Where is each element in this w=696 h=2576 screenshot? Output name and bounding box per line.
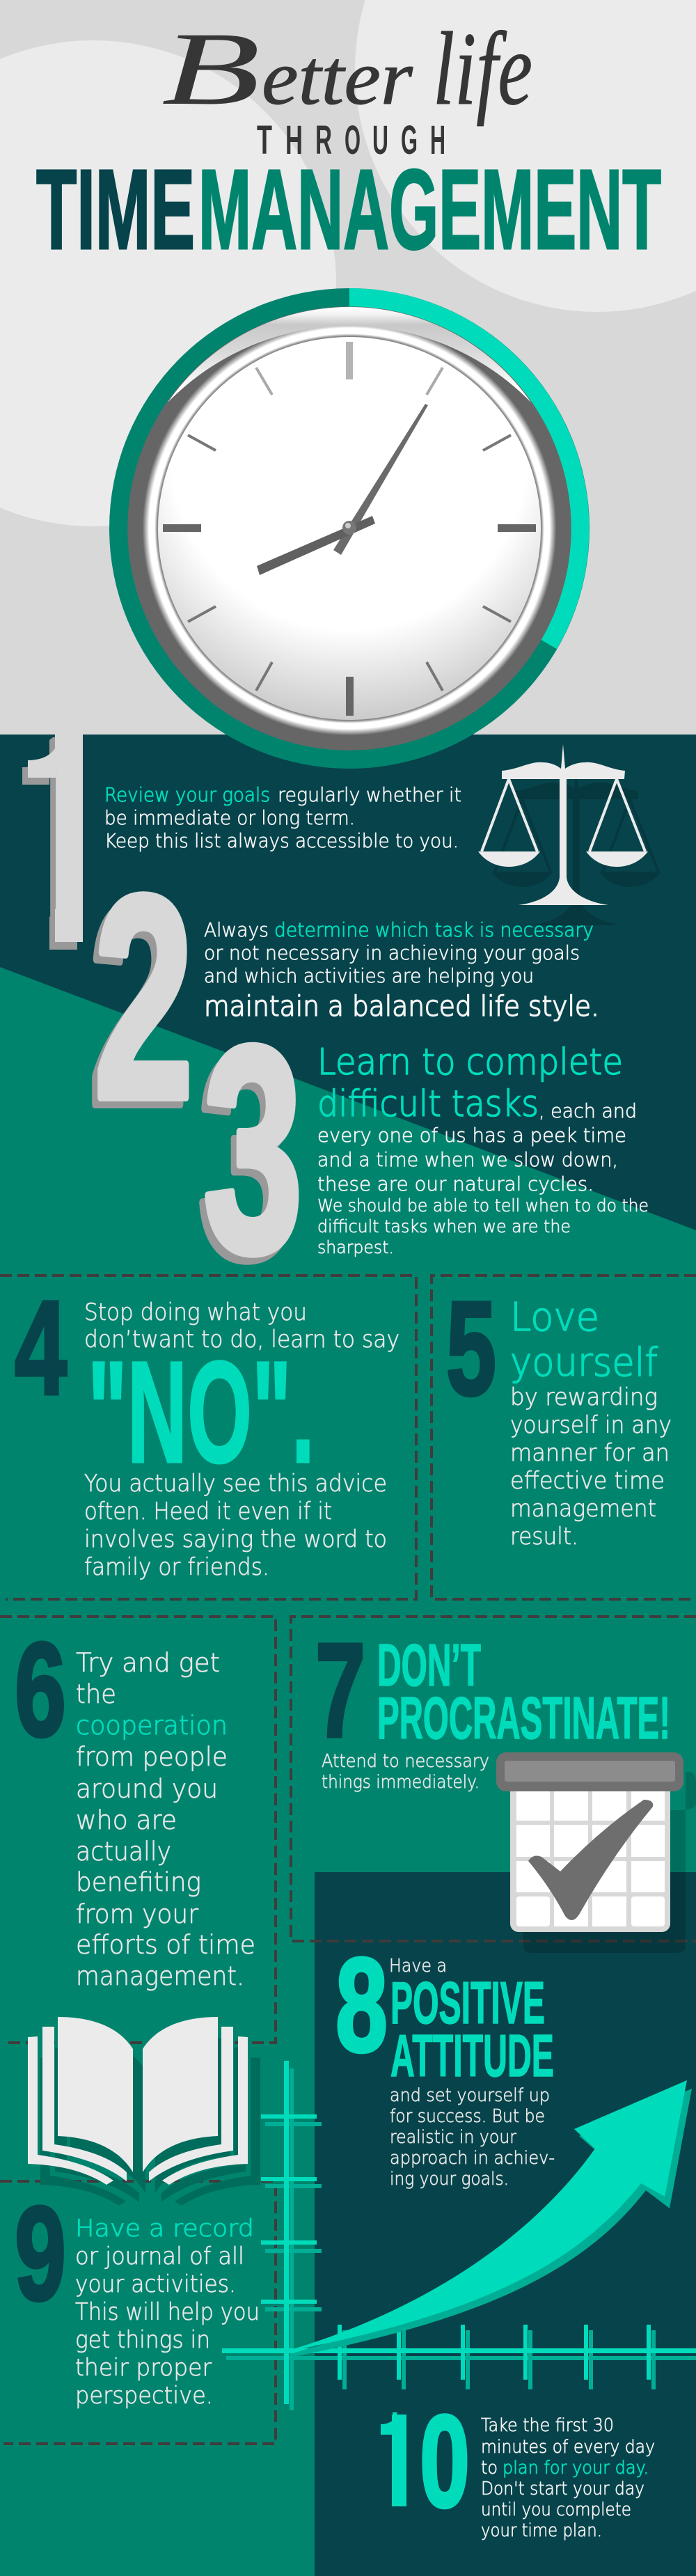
tip 10 text: to [481, 2458, 498, 2479]
number 1 [22, 735, 83, 950]
number 4: 4 [15, 1273, 67, 1422]
tip 1 text: regularly whether it [278, 783, 461, 806]
title: U [372, 118, 388, 163]
tip 8 heading: ATTITUDE [390, 2023, 554, 2089]
tip 1 text [104, 783, 461, 852]
tip 1 text: be immediate or long term. [104, 806, 355, 829]
tip 3 text [317, 1042, 649, 1257]
clock [109, 288, 590, 769]
tip 3 text: every one of us has a peek time [317, 1124, 626, 1147]
tip 2 text [204, 918, 599, 1023]
tip 10 text: plan for your day. [503, 2458, 649, 2479]
tip 6 text: from people [76, 1742, 228, 1772]
tip 6 text: Try and get [76, 1648, 220, 1678]
tip 10 text [481, 2415, 655, 2541]
tip 3 text: and a time when we slow down, [317, 1148, 618, 1171]
panel: tip 7 border [291, 1617, 696, 1941]
tip 2 text: Always [204, 918, 269, 941]
tip 10 text: Don't start your day [481, 2479, 644, 2499]
title: B [161, 11, 260, 127]
number 1: 1 [0, 666, 141, 1007]
number 3 [198, 987, 303, 1320]
tip 8 text: Have a [389, 1956, 447, 1977]
tip 4 text [84, 1298, 400, 1581]
tip 8 heading [390, 1970, 554, 2089]
clock ticks [163, 342, 536, 716]
number 2: 2 [94, 835, 193, 1159]
tip 3 text: Learn to complete [317, 1042, 623, 1083]
tip 2 text: determine which task is necessary [274, 918, 594, 941]
tip 6 text: management. [76, 1961, 244, 1991]
tip 6 text: around you [76, 1774, 218, 1804]
tip 4 text: involves saying the word to [84, 1525, 387, 1553]
tip 6 text [76, 1648, 255, 1991]
tip 3 text: these are our natural cycles. [317, 1172, 594, 1195]
tip 9 text: or journal of all [75, 2243, 244, 2270]
number 7: 7 [315, 1615, 365, 1765]
title: etter [262, 35, 413, 121]
tip 7 text: Attend to necessary [322, 1751, 489, 1772]
title: T [257, 118, 272, 163]
panel: tip 6 border [0, 1617, 276, 2043]
tip 4 text: don’twant to do, learn to say [84, 1326, 400, 1353]
tip 2 text: maintain a balanced life style. [204, 991, 599, 1023]
tip 5 text: yourself in any [510, 1411, 672, 1439]
tip 6 text: efforts of time [76, 1930, 255, 1960]
tip 6 text: who are [76, 1805, 177, 1835]
icon: book shadow [40, 2038, 260, 2206]
tip 3 text: , each and [539, 1099, 637, 1122]
title: life [433, 11, 532, 127]
tip 8 text: for success. But be [390, 2106, 545, 2127]
tip 9 text: their proper [75, 2354, 212, 2382]
number 6: 6 [15, 1615, 66, 1764]
title: O [345, 118, 361, 163]
tip 4 text: often. Heed it even if it [84, 1498, 332, 1525]
icon: scales shadow [491, 764, 661, 925]
tip 8 text: approach in achiev- [390, 2148, 555, 2169]
title [36, 11, 661, 273]
tip 9 text: Have a record [75, 2215, 254, 2243]
tip 5 text: effective time [510, 1467, 665, 1495]
tip 7 heading [377, 1633, 670, 1752]
icon: calendar [496, 1752, 683, 1932]
number 2: 2 [88, 842, 188, 1165]
tip 5 text: result. [510, 1523, 578, 1550]
number 10: 0 [420, 2388, 470, 2534]
callout: NO: "NO". [88, 1332, 315, 1493]
chart axes shadow [226, 2068, 696, 2410]
tip 8 text [389, 1956, 555, 2190]
number 9: 9 [15, 2178, 66, 2328]
number 10 [381, 2412, 468, 2509]
panel: tip 5 border [432, 1275, 696, 1599]
tip 2 text: or not necessary in achieving your goals [204, 941, 580, 964]
number 10: 1 [366, 2388, 429, 2534]
panel: tip 4 border [0, 1275, 416, 1599]
icon: check mark [528, 1800, 653, 1920]
tip 8 heading: POSITIVE [390, 1970, 545, 2036]
number 5: 5 [446, 1273, 496, 1423]
tip 5 text: manner for an [510, 1439, 670, 1467]
tip 3 text: difficult tasks when we are the [317, 1216, 571, 1236]
tip 9 text: your activities. [75, 2270, 236, 2298]
tip 5 text: yourself [510, 1340, 658, 1385]
tip 7 text [322, 1751, 489, 1793]
tip 9 text: This will help you [75, 2298, 260, 2326]
number 3: 3 [203, 987, 303, 1313]
title: TIME [36, 146, 195, 273]
tip 3 text: sharpest. [317, 1237, 394, 1257]
tip 4 text: Stop doing what you [84, 1298, 307, 1326]
panel: tip 9 border [0, 2181, 276, 2444]
title: H [285, 118, 303, 163]
title: H [430, 118, 445, 163]
tip 6 text: from your [76, 1899, 199, 1929]
tip 7 text: things immediately. [322, 1772, 480, 1793]
icon: calendar shadow [523, 1772, 696, 1953]
tip 5 text: by rewarding [510, 1383, 658, 1411]
title: G [401, 118, 418, 163]
tip 9 text [75, 2215, 260, 2410]
chart axes [222, 2061, 696, 2404]
tip 10 text: until you complete [481, 2499, 631, 2520]
tip 8 text: ing your goals. [390, 2169, 509, 2190]
tip 9 text: perspective. [75, 2382, 213, 2410]
tip 9 text: get things in [75, 2326, 210, 2354]
tip 10 text: Take the first 30 [481, 2415, 614, 2436]
tip 1 text: Keep this list always accessible to you. [104, 829, 459, 852]
tip 10 text: your time plan. [481, 2520, 602, 2541]
icon: scales [478, 744, 648, 905]
tip 5 text: management [510, 1495, 656, 1523]
tip 3 text: We should be able to tell when to do the [317, 1195, 649, 1216]
tip 8 text: realistic in your [390, 2127, 516, 2148]
clock hands [257, 404, 428, 575]
tip 1 text: Review your goals [104, 783, 270, 806]
tip 5 text: Love [510, 1295, 599, 1340]
tip 3 text: difficult tasks [317, 1083, 539, 1125]
tip 4 text: family or friends. [84, 1553, 269, 1581]
number 3: 3 [198, 994, 297, 1320]
number 8: 8 [335, 1930, 388, 2080]
tip 6 text: actually [76, 1837, 171, 1867]
tip 6 text: the [76, 1679, 116, 1709]
background: body panels [0, 735, 696, 2576]
tip 5 text [510, 1295, 672, 1550]
arrow [293, 2080, 692, 2357]
title: R [315, 118, 332, 163]
tip 6 text: cooperation [76, 1711, 228, 1741]
tip 7 heading: DON’T [377, 1633, 481, 1699]
icon: book [28, 2017, 248, 2185]
background: header [0, 0, 696, 735]
tip 6 text: benefiting [76, 1867, 201, 1897]
number 2 [88, 835, 193, 1165]
tip 8 text: and set yourself up [390, 2085, 550, 2106]
tip 2 text: and which activities are helping you [204, 964, 534, 987]
tip 4 text: You actually see this advice [84, 1470, 387, 1498]
tip 10 text: minutes of every day [481, 2437, 655, 2458]
